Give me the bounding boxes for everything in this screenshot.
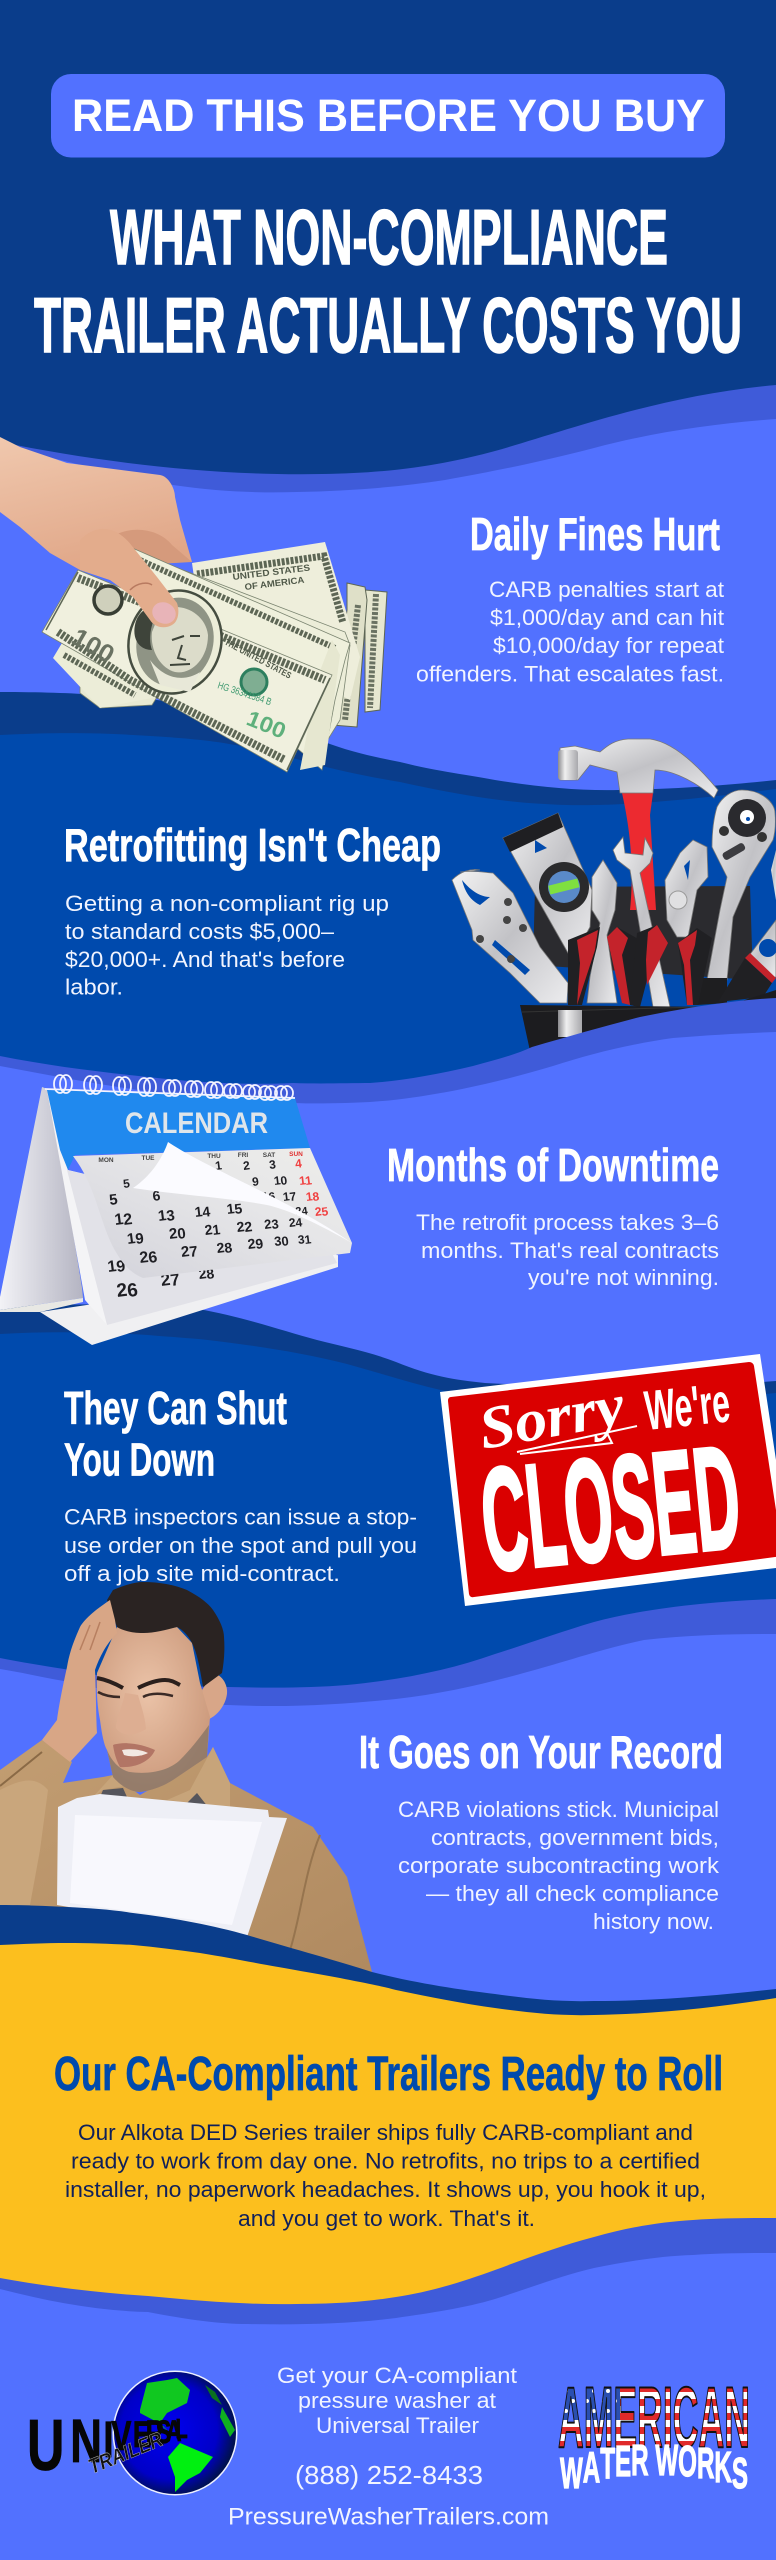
logo wordmark: universal: V bbox=[111, 2412, 132, 2459]
text: record: CARB violations stick. Municipal bbox=[398, 1797, 719, 1822]
panel: compliant trailers yellow background bbox=[0, 1943, 776, 2560]
middle fanned bills bbox=[130, 560, 350, 757]
man stubble bbox=[107, 1725, 209, 1792]
logo wordmark: water works: WATER WORKS bbox=[560, 2436, 748, 2498]
calendar dates: 5 bbox=[122, 1176, 131, 1191]
man tie and collar bbox=[100, 1788, 208, 1807]
bill portrait bbox=[115, 578, 235, 706]
logo wordmark: universal: A bbox=[166, 2413, 182, 2448]
calendar dates: 9 bbox=[251, 1174, 260, 1189]
calendar dates: 25 bbox=[314, 1204, 329, 1219]
icon: stressed man holding papers bbox=[0, 1582, 372, 1972]
text: footer call to action: Universal Trailer bbox=[316, 2413, 479, 2438]
calendar top page bbox=[73, 1148, 352, 1278]
bill label: united states: UNITED STATES bbox=[232, 563, 311, 582]
bill seal bbox=[94, 586, 122, 614]
calendar lower dates: 19 bbox=[107, 1258, 126, 1276]
calendar dates: 6 bbox=[152, 1187, 161, 1204]
calendar dates: 31 bbox=[297, 1232, 312, 1247]
calendar dates: 28 bbox=[216, 1239, 233, 1256]
calendar dates: 29 bbox=[247, 1235, 264, 1252]
calendar dates: 23 bbox=[263, 1216, 280, 1232]
man face bbox=[97, 1627, 210, 1792]
text: record: corporate subcontracting work bbox=[398, 1853, 720, 1878]
right wrench bbox=[748, 920, 776, 978]
logo wordmark: trailer: TRAILER bbox=[85, 2428, 167, 2479]
calendar dates: 5 bbox=[108, 1191, 119, 1209]
icon: hand holding money bbox=[0, 437, 387, 772]
calendar dates: 24 bbox=[295, 1205, 309, 1218]
text: daily fines: $1,000/day and can hit bbox=[490, 605, 724, 630]
text: retrofitting bbox=[65, 891, 389, 1000]
calendar lower dates: 28 bbox=[198, 1265, 215, 1282]
text: record: history now. bbox=[593, 1909, 714, 1934]
ratchet wrench bbox=[707, 790, 775, 980]
text: record: — they all check compliance bbox=[426, 1881, 719, 1906]
wave: second divider band bbox=[0, 692, 776, 2560]
slip pliers bbox=[665, 840, 708, 937]
heading: they can shut you down: They Can Shut bbox=[64, 1382, 287, 1434]
calendar dates: 17 bbox=[282, 1189, 297, 1204]
text: downtime: The retrofit process takes 3–6 bbox=[416, 1210, 719, 1235]
text: shut down: off a job site mid-contract. bbox=[64, 1561, 340, 1586]
wave: seventh divider band bbox=[0, 2218, 776, 2560]
man brows and eyes bbox=[97, 1678, 180, 1688]
text: downtime: you're not winning. bbox=[528, 1265, 719, 1290]
text: footer call to action: pressure washer at bbox=[298, 2388, 496, 2413]
calendar header text: CALENDAR bbox=[125, 1107, 268, 1140]
calendar lower pages bbox=[47, 1090, 338, 1325]
calendar weekday row: FRI bbox=[238, 1152, 248, 1159]
text: ca-compliant trailers: installer, no paperwork headaches. It shows up, you hook it up, bbox=[65, 2177, 706, 2202]
man nose bbox=[116, 1693, 146, 1735]
panel: on your record background bbox=[0, 1634, 776, 2560]
calendar lower dates: 26 bbox=[115, 1280, 139, 1302]
calendar dates: 20 bbox=[168, 1225, 187, 1243]
icon: desk calendar bbox=[0, 1075, 352, 1345]
calendar lower dates bbox=[107, 1258, 215, 1302]
text: shut down: use order on the spot and pull you bbox=[64, 1533, 417, 1558]
text: ca-compliant trailers: Our Alkota DED Series trailer ships fully CARB-compliant and bbox=[78, 2120, 693, 2145]
man papers bbox=[57, 1794, 287, 1937]
text: website: PressureWasherTrailers.com bbox=[228, 2504, 549, 2530]
title bbox=[34, 193, 742, 369]
wave: fifth divider band bbox=[0, 1599, 776, 2560]
text: footer call to action: Get your CA-compliant bbox=[277, 2363, 517, 2388]
hammer bbox=[558, 739, 718, 910]
calendar page curl bbox=[133, 1142, 352, 1243]
calendar dates: 15 bbox=[226, 1200, 243, 1217]
red-black handles bbox=[568, 927, 600, 1005]
text: downtime bbox=[416, 1210, 719, 1290]
icon: tool box with tools bbox=[452, 739, 776, 1060]
calendar dates: 18 bbox=[305, 1189, 320, 1204]
calendar spiral binding bbox=[45, 1075, 295, 1100]
thumb bbox=[80, 529, 178, 627]
man hair bbox=[107, 1582, 224, 1687]
heading: they can shut you down bbox=[64, 1382, 287, 1486]
logo wordmark: universal: L bbox=[175, 2414, 188, 2445]
tool box tray bbox=[520, 990, 776, 1060]
calendar blue header bbox=[47, 1090, 310, 1170]
calendar dates: 16 bbox=[261, 1189, 276, 1204]
sign text: sorry: Sorry bbox=[474, 1371, 629, 1462]
calendar dates: 4 bbox=[294, 1156, 303, 1171]
man shirt bbox=[0, 1740, 372, 1972]
logo wordmark: universal: I bbox=[103, 2412, 114, 2468]
lower left bills bbox=[80, 675, 157, 708]
wave: fourth divider band bbox=[0, 1304, 776, 2560]
wave: third divider band bbox=[0, 998, 776, 2560]
text: ca-compliant trailers: ready to work from day one. No retrofits, no trips to a certified bbox=[71, 2148, 700, 2174]
icon: sorry we're closed sign bbox=[440, 1354, 776, 1606]
calendar weekday row: MON bbox=[98, 1157, 114, 1164]
man hand on head bbox=[42, 1600, 117, 1762]
calendar dates: 1 bbox=[214, 1158, 223, 1173]
text: retrofitting: $20,000+. And that's before bbox=[65, 947, 345, 972]
panel: footer background bbox=[0, 2253, 776, 2560]
calendar dates: 12 bbox=[114, 1211, 133, 1229]
text: record bbox=[398, 1797, 720, 1934]
calendar dates bbox=[108, 1156, 329, 1267]
text: retrofitting: Getting a non-compliant rig up bbox=[65, 891, 389, 916]
bill label: treasury: THE UNITED STATES bbox=[223, 637, 293, 681]
heading: retrofitting isn't cheap: Retrofitting Isn't Cheap bbox=[64, 819, 441, 871]
text: daily fines: $10,000/day for repeat bbox=[493, 633, 724, 658]
text: shut down bbox=[64, 1504, 417, 1586]
bill green value: 100 bbox=[243, 705, 290, 744]
badge: read this before you buy bbox=[51, 74, 725, 158]
text: ca-compliant trailers: and you get to work. That's it. bbox=[238, 2206, 535, 2231]
bill label: of america: OF AMERICA bbox=[244, 575, 305, 592]
man mouth bbox=[113, 1743, 155, 1767]
calendar weekday row: THU bbox=[207, 1153, 221, 1160]
calendar weekday row: TUE bbox=[142, 1155, 155, 1162]
text: daily fines: offenders. That escalates fast. bbox=[416, 662, 724, 686]
text: ca-compliant trailers bbox=[65, 2120, 706, 2231]
logo wordmark: universal: R bbox=[146, 2414, 164, 2453]
logo wordmark: universal: S bbox=[156, 2414, 171, 2450]
calendar dates: 26 bbox=[139, 1249, 158, 1267]
spirit level bbox=[503, 813, 592, 960]
calendar weekday row bbox=[98, 1151, 303, 1164]
calendar dates: 3 bbox=[268, 1157, 277, 1172]
text: downtime: months. That's real contracts bbox=[421, 1238, 719, 1263]
calendar dates: 13 bbox=[157, 1207, 176, 1225]
heading: they can shut you down: You Down bbox=[64, 1434, 215, 1486]
front bill bbox=[42, 570, 332, 772]
text: footer call to action bbox=[277, 2363, 517, 2438]
cutter head bbox=[587, 860, 617, 1003]
bill treasury seal bbox=[241, 669, 267, 695]
calendar dates: 24 bbox=[288, 1215, 303, 1230]
back bill bbox=[192, 542, 360, 700]
tool box latch bbox=[558, 1010, 582, 1037]
panel: shut down background bbox=[0, 1332, 776, 2560]
calendar dates: 21 bbox=[204, 1221, 221, 1238]
tool box back bbox=[533, 886, 753, 980]
bill corner value: 100 bbox=[67, 623, 119, 669]
calendar dates: 27 bbox=[180, 1243, 199, 1261]
calendar dates: 19 bbox=[126, 1230, 145, 1248]
wave: sixth divider band bbox=[0, 1905, 776, 2560]
bill serial: HG 36341584 B bbox=[216, 680, 273, 708]
calendar weekday row: SAT bbox=[263, 1152, 275, 1159]
text: daily fines: CARB penalties start at bbox=[489, 577, 724, 602]
logo wordmark: universal: E bbox=[133, 2414, 151, 2455]
calendar stand bbox=[0, 1087, 83, 1310]
text: retrofitting: to standard costs $5,000– bbox=[65, 919, 335, 944]
calendar dates: 10 bbox=[273, 1173, 288, 1188]
text: phone number: (888) 252-8433 bbox=[295, 2460, 483, 2490]
calendar dates: 22 bbox=[236, 1218, 253, 1235]
text: retrofitting: labor. bbox=[65, 974, 123, 1000]
panel: months of downtime background bbox=[0, 1032, 776, 2560]
logo wordmark: universal: N bbox=[70, 2408, 102, 2476]
calendar dates: 2 bbox=[242, 1158, 251, 1173]
text: daily fines bbox=[416, 577, 724, 686]
logo wordmark: universal: U bbox=[27, 2406, 64, 2486]
wrench bbox=[613, 837, 670, 1007]
calendar dates: 14 bbox=[194, 1203, 211, 1220]
text: record: contracts, government bids, bbox=[431, 1825, 719, 1850]
locking pliers bbox=[452, 869, 568, 1003]
text: shut down: CARB inspectors can issue a stop- bbox=[64, 1504, 417, 1530]
panel: retrofitting background bbox=[0, 733, 776, 2560]
right hand bill stack bbox=[365, 590, 387, 712]
calendar dates: 11 bbox=[298, 1173, 313, 1188]
badge: read this before you buy: READ THIS BEFORE YOU BUY bbox=[72, 90, 705, 141]
man ear bbox=[202, 1674, 227, 1720]
calendar dates: 30 bbox=[273, 1233, 290, 1249]
calendar weekday row: SUN bbox=[289, 1151, 303, 1158]
logo: universal trailer bbox=[27, 2370, 238, 2496]
logo: american water works bbox=[558, 2370, 750, 2498]
calendar lower dates: 27 bbox=[160, 1270, 181, 1290]
